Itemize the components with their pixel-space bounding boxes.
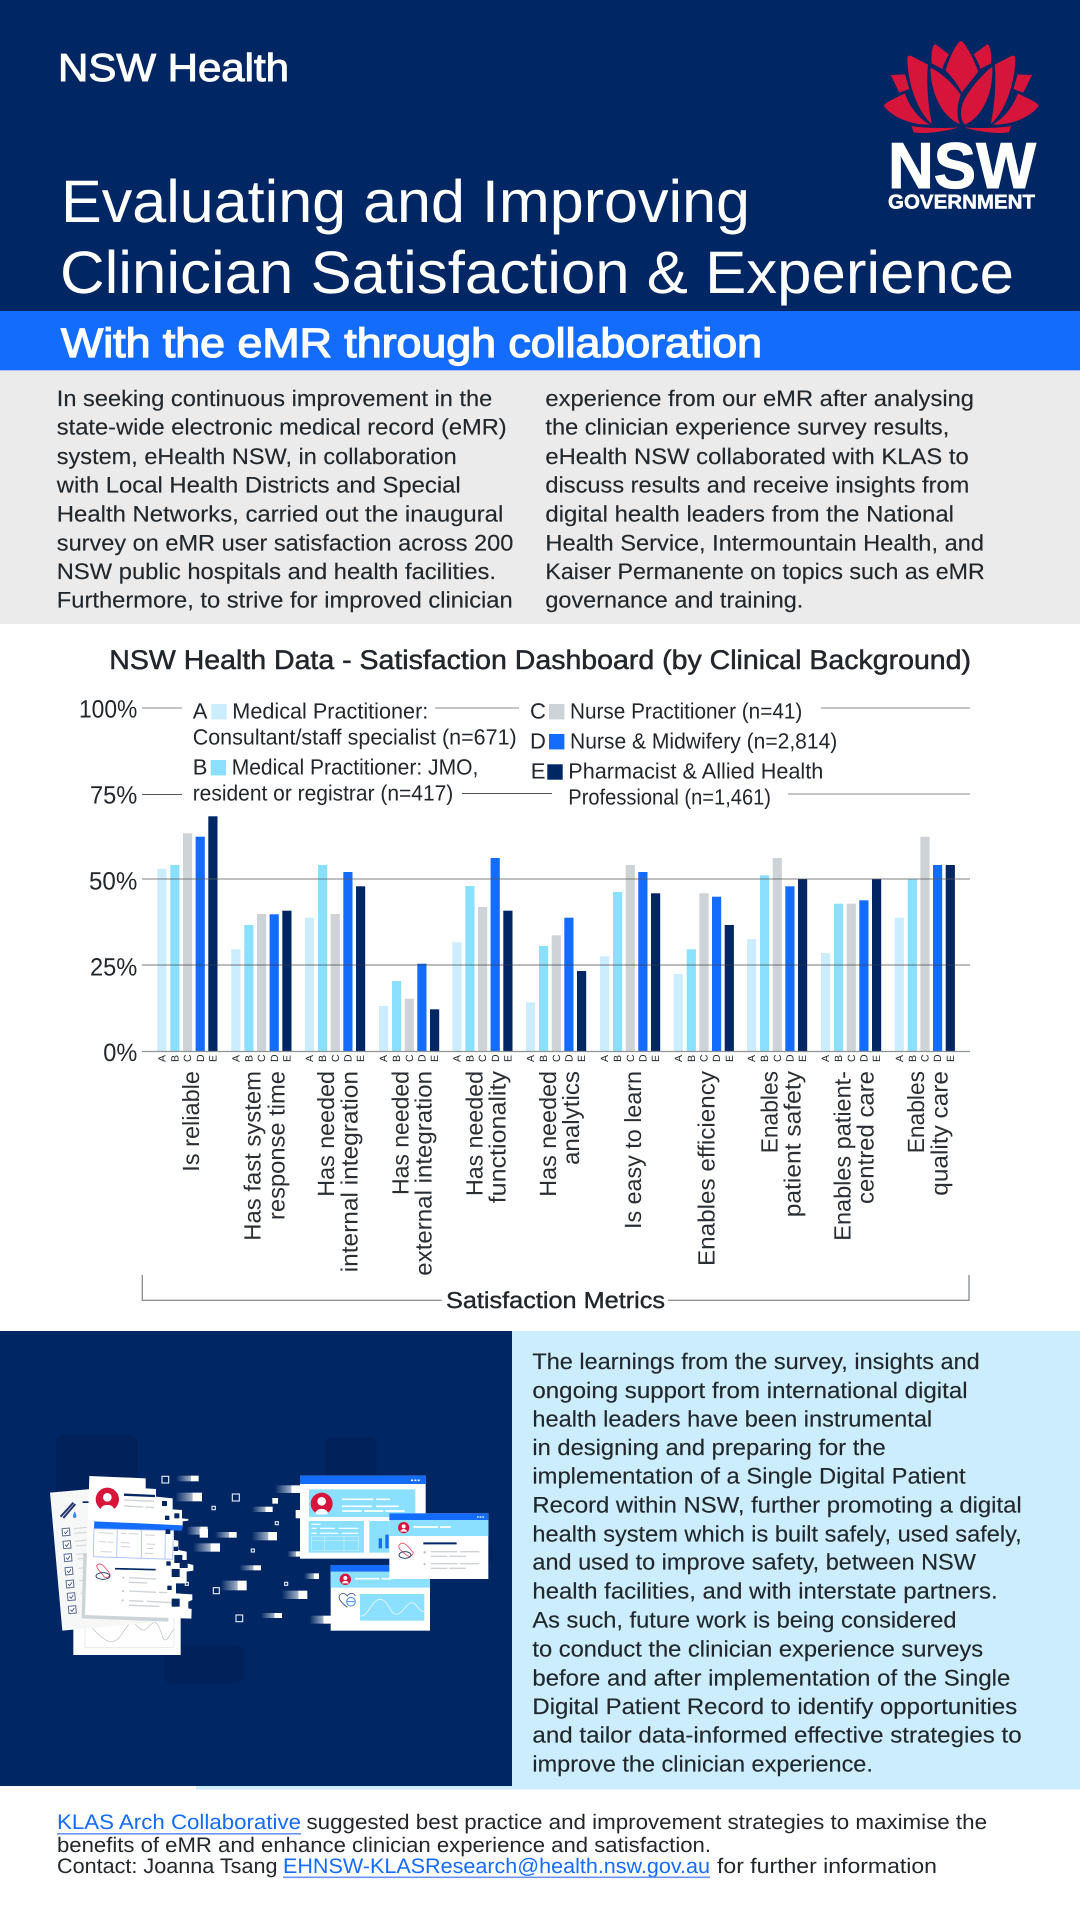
bars: Has fast system response time: A xyxy=(231,1055,243,1062)
bars: Enables patient safety: B xyxy=(759,1055,771,1062)
bars: Enables patient-centred care xyxy=(820,879,883,1062)
bars: Enables efficiency: B xyxy=(686,1055,698,1062)
bars: Has needed analytics: E xyxy=(576,1055,588,1062)
bars: Enables patient-centred care: A xyxy=(820,1055,832,1062)
bars: Enables patient safety: E xyxy=(797,1055,809,1062)
title xyxy=(60,168,1014,306)
bars: Enables patient safety: A xyxy=(746,1055,758,1062)
bars: Has needed internal integration: E xyxy=(355,1055,367,1062)
chart heading: NSW Health Data - Satisfaction Dashboard (by Clinical Background) xyxy=(109,645,971,675)
bars: Enables efficiency: D xyxy=(711,1054,723,1062)
bars: Enables patient-centred care: B xyxy=(833,1055,845,1062)
text block: intro right column: Kaiser Permanente on topics such as eMR xyxy=(545,559,985,584)
bars: Has fast system response time: B xyxy=(244,1055,256,1062)
text block: learnings: in designing and preparing for the xyxy=(532,1435,886,1460)
footer: KLAS link line: KLAS Arch Collaborative xyxy=(57,1811,301,1834)
legend xyxy=(193,699,837,810)
bars: Is easy to learn: A xyxy=(599,1055,611,1062)
bars: Enables quality care: E xyxy=(945,1055,957,1062)
bars: Is reliable: D xyxy=(195,1054,207,1062)
text block: learnings: health system which is built safely, used safely, xyxy=(532,1522,1022,1547)
bars: Has needed analytics: A xyxy=(525,1055,537,1062)
category labels: external integration xyxy=(411,1071,437,1276)
icon: pills xyxy=(96,1564,110,1579)
paper shadow xyxy=(82,1553,170,1622)
record table xyxy=(93,1521,183,1559)
panel: footer note xyxy=(57,1811,987,1878)
window: digital patient dashboard xyxy=(300,1476,426,1559)
legend item B: resident or registrar (n=417) xyxy=(193,781,453,806)
bars: Enables patient safety: D xyxy=(784,1054,796,1062)
x axis bracket: Satisfaction Metrics: Satisfaction Metrics xyxy=(446,1287,665,1313)
legend item B: Medical Practitioner: JMO, xyxy=(232,755,478,780)
bars: Has needed internal integration: B xyxy=(317,1055,329,1062)
category labels: centred care xyxy=(852,1071,878,1204)
text block: learnings: health leaders have been instrumental xyxy=(532,1407,932,1432)
bars: Is easy to learn: B xyxy=(612,1055,624,1062)
logo: NSW Government: NSW xyxy=(888,129,1037,202)
category labels: Has needed xyxy=(461,1071,487,1196)
bars: Enables patient-centred care: D xyxy=(858,1054,870,1062)
y axis labels: 75% xyxy=(90,781,137,809)
text block: intro left column: Furthermore, to strive for improved clinician xyxy=(57,588,513,613)
text block: learnings: and used to improve safety, between NSW xyxy=(532,1549,977,1574)
legend item C: Nurse Practitioner (n=41) xyxy=(570,699,802,724)
title: Clinician Satisfaction & Experience xyxy=(60,239,1014,306)
y axis labels xyxy=(79,695,137,1067)
legend item A: A xyxy=(193,699,208,724)
category labels: Is reliable xyxy=(178,1071,204,1172)
category labels: Has needed xyxy=(535,1071,561,1197)
panel: footer note: benefits of eMR and enhance clinician experience and satisfaction. xyxy=(57,1834,711,1857)
category labels: Has needed xyxy=(313,1071,339,1197)
dark background shapes xyxy=(56,1435,493,1683)
text block: learnings xyxy=(532,1349,1022,1776)
red profile icon xyxy=(96,1488,119,1511)
bars: Enables efficiency: E xyxy=(724,1055,736,1062)
y axis labels: 100% xyxy=(79,695,137,723)
text block: learnings: Record within NSW, further promoting a digital xyxy=(532,1493,1022,1518)
text block: intro right column: Health Service, Intermountain Health, and xyxy=(545,530,984,555)
category labels: internal integration xyxy=(337,1071,363,1272)
footer: contact line: for further information xyxy=(717,1855,937,1878)
bars: Enables efficiency: A xyxy=(673,1055,685,1062)
navy pixels xyxy=(162,1501,188,1607)
panel: subtitle band xyxy=(0,311,1080,370)
footer: contact line: Contact: Joanna Tsang xyxy=(57,1855,278,1878)
text block: intro left column: with Local Health Districts and Special xyxy=(56,473,461,498)
paper: back chart sheet xyxy=(73,1607,181,1655)
text block: intro right column: the clinician experience survey results, xyxy=(545,415,949,440)
legend item A: Consultant/staff specialist (n=671) xyxy=(193,725,517,750)
footer: contact line: EHNSW-KLASResearch@health.nsw.gov.au xyxy=(283,1855,710,1878)
bars: Enables quality care: A xyxy=(894,1055,906,1062)
bars: Enables efficiency: C xyxy=(699,1054,711,1062)
logo: NSW Government xyxy=(884,41,1039,214)
title: Evaluating and Improving xyxy=(61,168,750,235)
bars: Is easy to learn xyxy=(599,865,662,1062)
legend item A: Medical Practitioner: xyxy=(232,699,428,724)
bars: Is reliable: E xyxy=(208,1055,220,1062)
bars: Has fast system response time: E xyxy=(282,1055,294,1062)
bars: Has needed functionality xyxy=(452,858,514,1062)
bars: Has needed external integration: C xyxy=(404,1054,416,1062)
panel: introduction xyxy=(0,370,1080,624)
text block: learnings: and tailor data-informed effective strategies to xyxy=(532,1723,1022,1748)
bars: Has needed internal integration: A xyxy=(304,1055,316,1062)
text block: intro left column: Health Networks, carried out the inaugural xyxy=(57,502,503,527)
legend item E: Pharmacist & Allied Health xyxy=(568,759,823,784)
bars: Has needed internal integration: C xyxy=(330,1054,342,1062)
category labels: Enables patient- xyxy=(830,1071,856,1241)
outlined pixels xyxy=(162,1476,288,1622)
bars: Has needed functionality: B xyxy=(464,1055,476,1062)
paper: pixelating patient record xyxy=(85,1476,193,1619)
bars: Has needed external integration: E xyxy=(429,1055,441,1062)
category labels: analytics xyxy=(558,1071,584,1165)
category labels: Enables xyxy=(903,1071,929,1153)
category labels: Has fast system xyxy=(240,1071,266,1241)
bars: Enables quality care: C xyxy=(920,1054,932,1062)
legend item E xyxy=(531,759,823,810)
bars: Is reliable: A xyxy=(157,1055,169,1062)
bars: Has needed analytics: C xyxy=(551,1054,563,1062)
text block: intro left column: state-wide electronic medical record (eMR) xyxy=(57,415,507,440)
bars: Has needed functionality: A xyxy=(451,1055,463,1062)
text block: learnings: Digital Patient Record to identify opportunities xyxy=(532,1694,1017,1719)
text block: intro right column: eHealth NSW collaborated with KLAS to xyxy=(545,444,969,469)
text block: intro right column: governance and training. xyxy=(545,588,803,613)
y axis labels: 50% xyxy=(89,867,137,895)
text block: learnings: implementation of a Single Digital Patient xyxy=(532,1464,966,1489)
category labels: patient safety xyxy=(780,1071,806,1217)
panel: illustration of paper records becoming digital xyxy=(0,1331,512,1786)
text block: intro left column: NSW public hospitals and health facilities. xyxy=(57,559,496,584)
organisation name: NSW Health xyxy=(58,47,289,90)
bars: Has fast system response time xyxy=(230,911,294,1062)
white pixels xyxy=(200,1498,301,1538)
bars: Has fast system response time: D xyxy=(269,1054,281,1062)
bars: Has needed external integration: B xyxy=(391,1055,403,1062)
bars: Has needed functionality: C xyxy=(477,1054,489,1062)
legend item A xyxy=(193,699,517,750)
bars: Is reliable xyxy=(156,816,220,1062)
flying data fragments xyxy=(175,1476,331,1624)
icon: waratah flower xyxy=(884,41,1039,133)
bars: Has needed functionality: E xyxy=(502,1055,514,1062)
category labels: Is easy to learn xyxy=(620,1071,646,1229)
window: medication xyxy=(389,1513,488,1579)
legend item E: Professional (n=1,461) xyxy=(568,785,771,810)
bars: Has fast system response time: C xyxy=(256,1054,268,1062)
illustration: records to digital xyxy=(50,1435,493,1683)
bars: Has needed analytics: D xyxy=(564,1054,576,1062)
y axis labels: 0% xyxy=(103,1039,137,1067)
footer: KLAS link line xyxy=(57,1811,987,1835)
category labels: Enables efficiency xyxy=(693,1071,719,1266)
bars: Enables quality care xyxy=(894,837,957,1062)
legend item D: Nurse & Midwifery (n=2,814) xyxy=(570,729,837,754)
bars: Has needed functionality: D xyxy=(490,1054,502,1062)
legend item C: C xyxy=(530,699,546,724)
bars: Has needed analytics: B xyxy=(538,1055,550,1062)
bars: Enables patient-centred care: C xyxy=(846,1054,858,1062)
bars: Enables efficiency xyxy=(673,893,736,1062)
legend item E: E xyxy=(531,759,545,784)
bars: Enables quality care: D xyxy=(932,1054,944,1062)
text block: intro right column: experience from our eMR after analysing xyxy=(545,386,974,411)
text block: intro left column: system, eHealth NSW, in collaboration xyxy=(57,444,457,469)
category labels: Has needed xyxy=(387,1071,413,1195)
text block: learnings: to conduct the clinician experience surveys xyxy=(532,1637,983,1662)
bars: Enables patient safety: C xyxy=(772,1054,784,1062)
bars: Has needed internal integration xyxy=(304,865,367,1062)
bars: Enables quality care: B xyxy=(907,1055,919,1062)
text block: intro left column xyxy=(56,386,513,613)
panel: learnings text xyxy=(196,1331,1080,1790)
bars: Has needed external integration: D xyxy=(416,1054,428,1062)
red profile icon xyxy=(311,1493,333,1515)
bars: Is reliable: C xyxy=(182,1054,194,1062)
window: heart monitor xyxy=(331,1565,430,1631)
bars: Is easy to learn: E xyxy=(650,1055,662,1062)
bars: Enables patient safety xyxy=(746,858,809,1062)
x axis bracket: Satisfaction Metrics xyxy=(142,1275,969,1313)
paper: checklist sheet xyxy=(50,1488,169,1631)
text block: intro left column: In seeking continuous improvement in the xyxy=(57,386,492,411)
text block: intro right column: discuss results and receive insights from xyxy=(545,473,969,498)
text block: learnings: ongoing support from international digital xyxy=(532,1378,968,1403)
bars: Is easy to learn: D xyxy=(638,1054,650,1062)
text block: intro left column: survey on eMR user satisfaction across 200 xyxy=(57,530,513,555)
bars: Is easy to learn: C xyxy=(625,1054,637,1062)
text block: learnings: health facilities, and with interstate partners. xyxy=(532,1579,998,1604)
category labels: functionality xyxy=(485,1071,511,1203)
category labels xyxy=(178,1071,952,1276)
category labels: quality care xyxy=(926,1071,952,1196)
bars: Has needed analytics xyxy=(525,918,588,1062)
text block: learnings: The learnings from the survey, insights and xyxy=(532,1349,980,1374)
bars: Enables patient-centred care: E xyxy=(871,1055,883,1062)
logo: NSW Government: GOVERNMENT xyxy=(888,192,1035,214)
footer: KLAS link line: suggested best practice and improvement strategies to maximise the xyxy=(306,1811,987,1834)
text block: learnings: before and after implementation of the Single xyxy=(532,1665,1010,1690)
panel: header xyxy=(0,0,1080,311)
category labels: Enables xyxy=(756,1071,782,1153)
category labels: response time xyxy=(263,1071,289,1220)
legend item B: B xyxy=(193,755,207,780)
legend item D: D xyxy=(530,729,546,754)
text block: intro right column: digital health leaders from the National xyxy=(545,502,954,527)
bars: Has needed internal integration: D xyxy=(342,1054,354,1062)
y axis labels: 25% xyxy=(90,954,137,982)
bars: Is reliable: B xyxy=(170,1055,182,1062)
legend item B xyxy=(193,755,478,806)
footer: contact line xyxy=(57,1855,937,1878)
text block: intro right column xyxy=(545,386,985,613)
text block: learnings: As such, future work is being considered xyxy=(532,1608,957,1633)
bars: Has needed external integration: A xyxy=(378,1055,390,1062)
bar chart: satisfaction by clinical background xyxy=(79,695,970,1313)
bars: Has needed external integration xyxy=(378,964,441,1062)
panel: subtitle band: With the eMR through collaboration xyxy=(61,320,762,366)
text block: learnings: improve the clinician experience. xyxy=(532,1751,873,1776)
